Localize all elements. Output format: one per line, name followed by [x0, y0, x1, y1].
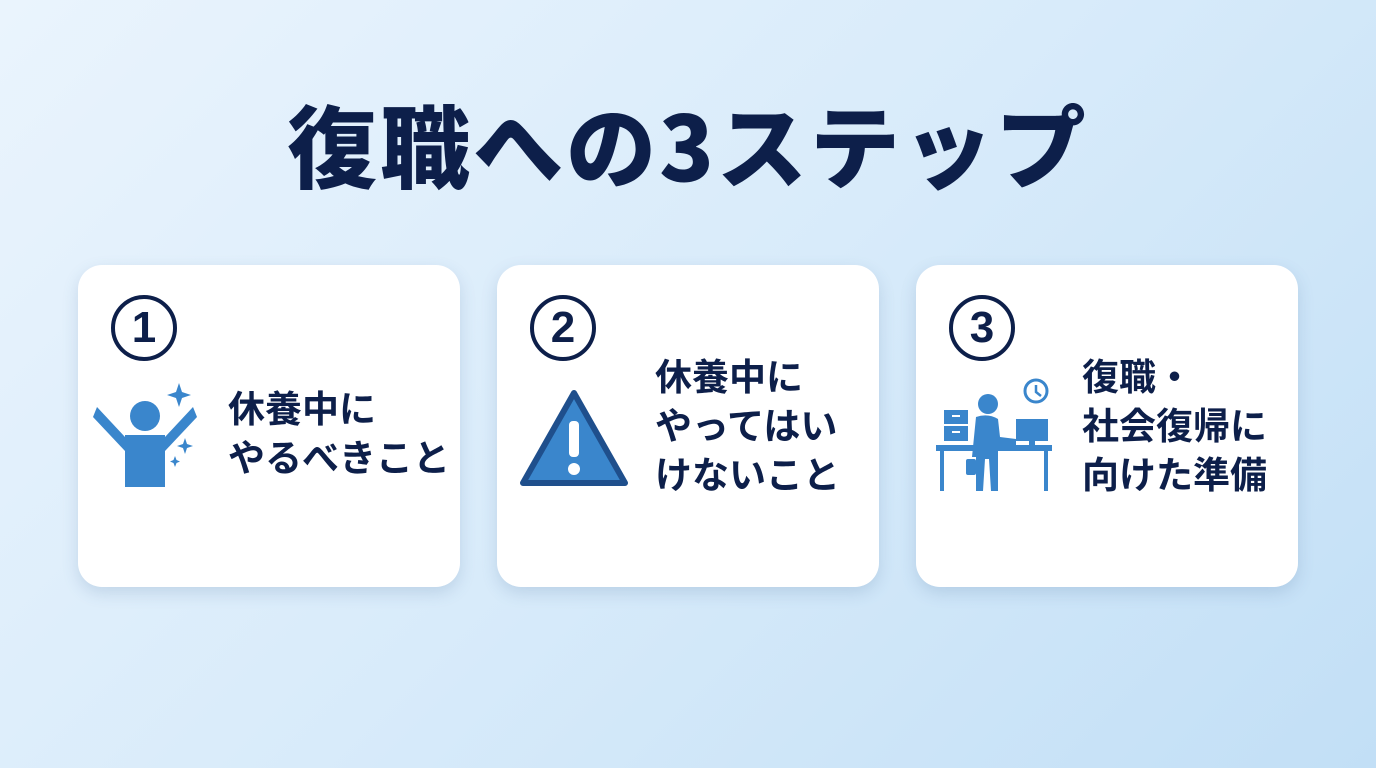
number 3: 3 [970, 303, 994, 352]
text: step 1: やるべきこと [228, 438, 450, 479]
number 1 [111, 295, 177, 361]
title: 復職への3ステップ [287, 77, 1089, 207]
panel: step 2 [497, 265, 879, 587]
text: step 2: 休養中に [655, 357, 803, 398]
panel: step 3 [916, 265, 1298, 587]
text: step 2: やってはい [655, 406, 837, 447]
icon: office worker at desk [936, 378, 1052, 491]
text: step 3: 向けた準備 [1082, 455, 1267, 496]
number 2 [530, 295, 596, 361]
panel: step 1 [78, 265, 460, 587]
icon: warning triangle [520, 390, 628, 486]
number 1: 1 [132, 303, 156, 352]
text: step 3 [1082, 357, 1267, 496]
text: step 1: 休養中に [228, 389, 376, 430]
text: step 2: けないこと [655, 455, 840, 496]
text: step 3: 社会復帰に [1082, 406, 1267, 447]
text: step 3: 復職・ [1082, 357, 1193, 398]
number 2: 2 [551, 303, 575, 352]
text: step 2 [655, 357, 840, 496]
text: step 1 [228, 389, 450, 479]
number 3 [949, 295, 1015, 361]
icon: person with sparkles [93, 383, 197, 487]
